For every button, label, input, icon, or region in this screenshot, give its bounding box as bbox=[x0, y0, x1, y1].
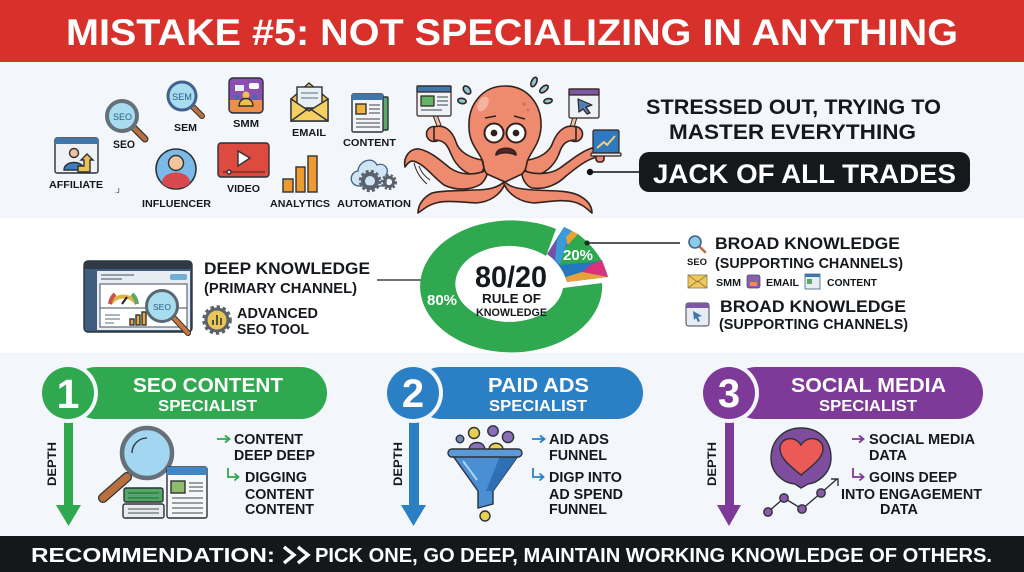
text block: broad knowledge with channels: SMM bbox=[716, 277, 741, 289]
heading: stressed out bbox=[646, 96, 941, 144]
panel: SEO content specialist: SPECIALIST bbox=[158, 398, 258, 415]
panel: paid ads specialist bbox=[383, 363, 643, 526]
band: specialist section background bbox=[0, 353, 1024, 536]
band: top section background bbox=[0, 62, 1024, 218]
donut centre label bbox=[475, 261, 547, 319]
icon: heart bubble and trend line bbox=[764, 428, 838, 516]
icon: small social tile bbox=[747, 275, 760, 288]
held browser window right bbox=[569, 89, 599, 118]
icon: small envelope bbox=[688, 275, 707, 288]
icon: SEM magnifier: SEM bbox=[174, 122, 197, 134]
step number: 3 bbox=[718, 372, 740, 416]
bullet list: DEEP DEEP bbox=[234, 448, 315, 464]
segment: 80 percent bbox=[420, 220, 602, 352]
text: advanced SEO tool: ADVANCED bbox=[237, 305, 318, 322]
step number: 1 bbox=[57, 371, 79, 417]
bullet list bbox=[217, 432, 315, 518]
leader line: deep knowledge bbox=[377, 277, 434, 283]
bullet list: INTO ENGAGEMENT bbox=[841, 487, 982, 503]
illustration: stressed octopus bbox=[405, 76, 621, 213]
donut centre label: KNOWLEDGE bbox=[476, 307, 547, 319]
text block: broad knowledge with channels bbox=[686, 234, 908, 333]
bullet list: FUNNEL bbox=[549, 448, 607, 464]
octopus face bbox=[484, 116, 526, 155]
depth arrow bbox=[717, 415, 741, 526]
step number bbox=[38, 363, 98, 423]
callout: jack of all trades: JACK OF ALL TRADES bbox=[653, 159, 956, 189]
title banner: MISTAKE #5: NOT SPECIALIZING IN ANYTHING bbox=[66, 12, 958, 53]
bullet list: CONTENT bbox=[245, 502, 314, 518]
bullet list: AID ADS bbox=[549, 432, 609, 448]
title banner bbox=[0, 0, 1024, 62]
icon: affiliate: .J bbox=[115, 189, 120, 195]
depth arrow bbox=[56, 415, 81, 526]
bullet list bbox=[841, 432, 982, 518]
motion lines bbox=[414, 163, 430, 184]
icon: SEO dashboard: SEO bbox=[153, 302, 171, 312]
panel: social media specialist: SPECIALIST bbox=[819, 398, 918, 415]
panel: social media specialist: DEPTH bbox=[705, 442, 719, 486]
header pill bbox=[70, 367, 327, 419]
icon: analytics bars bbox=[270, 156, 330, 210]
icon: SEO magnifier bbox=[107, 101, 145, 151]
callout: jack of all trades bbox=[639, 152, 970, 192]
icon: influencer: INFLUENCER bbox=[142, 198, 211, 210]
donut centre label: 80/20 bbox=[475, 261, 547, 294]
panel: paid ads specialist: SPECIALIST bbox=[489, 398, 588, 415]
icon: automation cloud gears: AUTOMATION bbox=[337, 198, 411, 210]
donut chart: 80/20 rule: 20% bbox=[563, 247, 593, 264]
icon: content: CONTENT bbox=[343, 137, 397, 149]
text block: broad knowledge with channels: (SUPPORTING CHANNELS) bbox=[715, 255, 903, 272]
icon: video: VIDEO bbox=[227, 183, 260, 195]
heading: stressed out: STRESSED OUT, TRYING TO bbox=[646, 96, 941, 119]
text: deep knowledge: (PRIMARY CHANNEL) bbox=[204, 281, 357, 297]
leader line: broad knowledge bbox=[584, 240, 680, 246]
panel: paid ads specialist: DEPTH bbox=[391, 442, 405, 486]
icon: small SEO magnifier bbox=[689, 236, 705, 252]
tentacle arms bbox=[405, 126, 604, 213]
icon: content bbox=[343, 94, 397, 149]
octopus head bbox=[469, 86, 541, 182]
icon: SEO magnifier: SEO bbox=[113, 139, 135, 151]
bullet list: FUNNEL bbox=[549, 502, 607, 518]
donut chart: 80/20 rule: 80% bbox=[427, 292, 457, 309]
text block: broad knowledge with channels: BROAD KNOWLEDGE bbox=[720, 297, 906, 316]
text: deep knowledge bbox=[204, 259, 370, 297]
text block: broad knowledge with channels: SEO bbox=[687, 257, 707, 267]
icon: automation cloud gears bbox=[337, 160, 411, 210]
bullet list: SOCIAL MEDIA bbox=[869, 432, 976, 448]
icon: small content page bbox=[805, 274, 820, 289]
icon: SEO dashboard bbox=[84, 261, 192, 333]
icon: gear bbox=[204, 306, 230, 334]
callout connector bbox=[587, 169, 640, 175]
bullet list: DIGP INTO bbox=[549, 470, 622, 486]
donut chart: 80/20 rule bbox=[420, 220, 608, 352]
text block: broad knowledge with channels: EMAIL bbox=[766, 277, 800, 289]
panel: SEO content specialist: SEO CONTENT bbox=[133, 375, 283, 397]
panel: paid ads specialist: PAID ADS bbox=[488, 375, 589, 397]
text: advanced SEO tool: SEO TOOL bbox=[237, 321, 309, 338]
text block: broad knowledge with channels: (SUPPORTING CHANNELS) bbox=[719, 316, 908, 333]
depth arrow bbox=[401, 415, 426, 526]
icon: SMM: SMM bbox=[233, 118, 259, 130]
icon: affiliate bbox=[49, 138, 120, 195]
heading: stressed out: MASTER EVERYTHING bbox=[669, 121, 916, 144]
bullet list: AD SPEND bbox=[549, 487, 623, 503]
icon: SMM bbox=[229, 78, 263, 130]
panel: marketing channel icons bbox=[49, 78, 411, 210]
bullet list: DIGGING bbox=[245, 470, 307, 486]
icon: SEO magnifier: SEO bbox=[113, 112, 132, 123]
icon: video bbox=[218, 143, 269, 195]
sweat drops bbox=[457, 76, 553, 104]
bullet list: CONTENT bbox=[245, 487, 314, 503]
icon: influencer bbox=[142, 149, 211, 210]
bullet list: GOINS DEEP bbox=[869, 470, 957, 486]
icon: small cursor window bbox=[686, 303, 709, 326]
icon: email bbox=[291, 83, 328, 139]
icon: SEM magnifier: SEM bbox=[172, 92, 192, 102]
held browser window left bbox=[417, 86, 451, 116]
text block: broad knowledge with channels: CONTENT bbox=[827, 277, 878, 289]
text: advanced SEO tool bbox=[237, 305, 318, 338]
step number: 2 bbox=[402, 372, 424, 416]
header pill bbox=[730, 367, 983, 419]
segment: 20 percent wedge bbox=[547, 227, 608, 282]
icon: funnel bbox=[448, 426, 522, 521]
panel: SEO content specialist: DEPTH bbox=[45, 442, 59, 486]
held laptop bbox=[591, 130, 621, 156]
step number bbox=[383, 363, 443, 423]
bullet list: CONTENT bbox=[234, 432, 303, 448]
icon: analytics bars: ANALYTICS bbox=[270, 198, 330, 210]
icon: SEM magnifier bbox=[168, 82, 202, 134]
icon: email: EMAIL bbox=[292, 127, 327, 139]
recommendation bar: RECOMMENDATION: bbox=[31, 545, 275, 567]
bullet list: DATA bbox=[869, 448, 908, 464]
icon: magnifier and documents bbox=[103, 428, 207, 518]
bullet list bbox=[532, 432, 623, 518]
bullet list: DATA bbox=[880, 502, 919, 518]
icon: affiliate: AFFILIATE bbox=[49, 179, 103, 191]
panel: social media specialist: SOCIAL MEDIA bbox=[791, 375, 946, 397]
panel: SEO content specialist bbox=[38, 363, 327, 526]
recommendation bar bbox=[0, 536, 1024, 572]
header pill bbox=[415, 367, 643, 419]
donut centre label: RULE OF bbox=[482, 291, 541, 306]
icon: double chevron bbox=[284, 547, 308, 563]
panel: social media specialist bbox=[699, 363, 983, 526]
recommendation bar: PICK ONE, GO DEEP, MAINTAIN WORKING KNOWLEDGE OF OTHERS. bbox=[315, 545, 992, 567]
text: deep knowledge: DEEP KNOWLEDGE bbox=[204, 259, 370, 278]
text block: broad knowledge with channels: BROAD KNOWLEDGE bbox=[715, 234, 900, 253]
step number bbox=[699, 363, 759, 423]
